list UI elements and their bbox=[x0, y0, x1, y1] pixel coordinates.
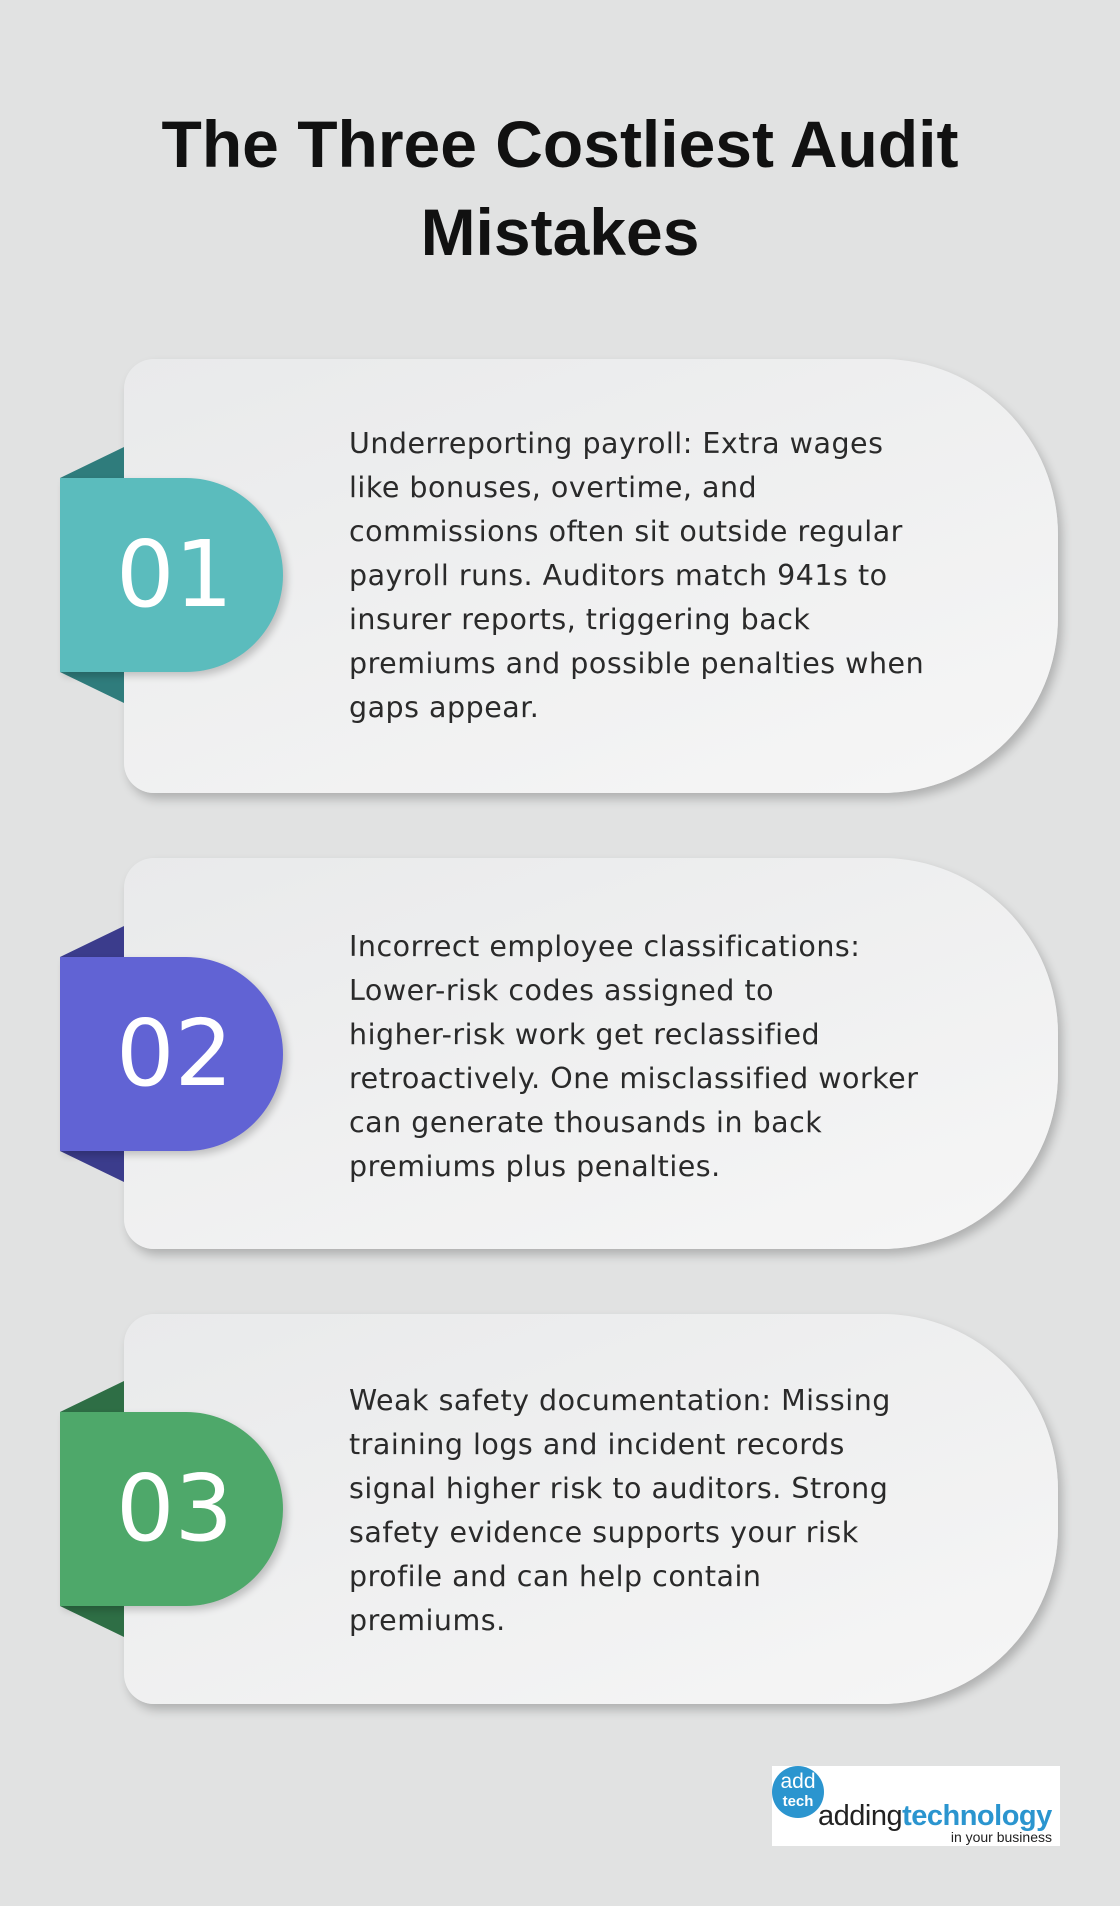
text 1: gaps appear. bbox=[349, 691, 539, 724]
text 1: commissions often sit outside regular bbox=[349, 515, 903, 548]
fold top 1 bbox=[60, 447, 124, 703]
text 1: payroll runs. Auditors match 941s to bbox=[349, 559, 888, 592]
text 2: can generate thousands in back bbox=[349, 1106, 822, 1139]
text 1: premiums and possible penalties when bbox=[349, 647, 924, 680]
text 3: signal higher risk to auditors. Strong bbox=[349, 1472, 888, 1505]
text 1 bbox=[349, 427, 924, 724]
tab 02: 02 bbox=[116, 1000, 233, 1107]
text 2: Lower-risk codes assigned to bbox=[349, 974, 774, 1007]
text 3: safety evidence supports your risk bbox=[349, 1516, 859, 1549]
logo circle: add bbox=[780, 1770, 816, 1793]
tab 02 bbox=[60, 957, 283, 1151]
title: The Three Costliest Audit bbox=[162, 107, 958, 181]
card 3 bbox=[124, 1314, 1058, 1704]
card 1 bbox=[124, 359, 1058, 793]
text 3: Weak safety documentation: Missing bbox=[349, 1384, 891, 1417]
text 2 bbox=[349, 930, 918, 1183]
text 3 bbox=[349, 1384, 891, 1637]
text 3: training logs and incident records bbox=[349, 1428, 845, 1461]
text 1: like bonuses, overtime, and bbox=[349, 471, 757, 504]
logo bbox=[772, 1766, 1060, 1846]
tab 03: 03 bbox=[116, 1455, 233, 1562]
text 2: higher-risk work get reclassified bbox=[349, 1018, 820, 1051]
tab 03 bbox=[60, 1412, 283, 1606]
logo circle bbox=[772, 1766, 824, 1818]
text 2: Incorrect employee classifications: bbox=[349, 930, 860, 963]
fold 3 bbox=[60, 1381, 124, 1637]
logo wordmark: addingtechnology bbox=[818, 1800, 1052, 1832]
logo circle: tech bbox=[783, 1793, 813, 1810]
text 3: profile and can help contain bbox=[349, 1560, 761, 1593]
text 2: premiums plus penalties. bbox=[349, 1150, 721, 1183]
text 2: retroactively. One misclassified worker bbox=[349, 1062, 918, 1095]
logo: in your business bbox=[951, 1829, 1052, 1845]
title: Mistakes bbox=[421, 195, 699, 269]
fold 2 bbox=[60, 926, 124, 1182]
card 2 bbox=[124, 858, 1058, 1249]
text 3: premiums. bbox=[349, 1604, 506, 1637]
text 1: Underreporting payroll: Extra wages bbox=[349, 427, 883, 460]
tab 01 bbox=[60, 478, 283, 672]
title bbox=[162, 107, 958, 269]
tab 01: 01 bbox=[116, 521, 233, 628]
text 1: insurer reports, triggering back bbox=[349, 603, 810, 636]
